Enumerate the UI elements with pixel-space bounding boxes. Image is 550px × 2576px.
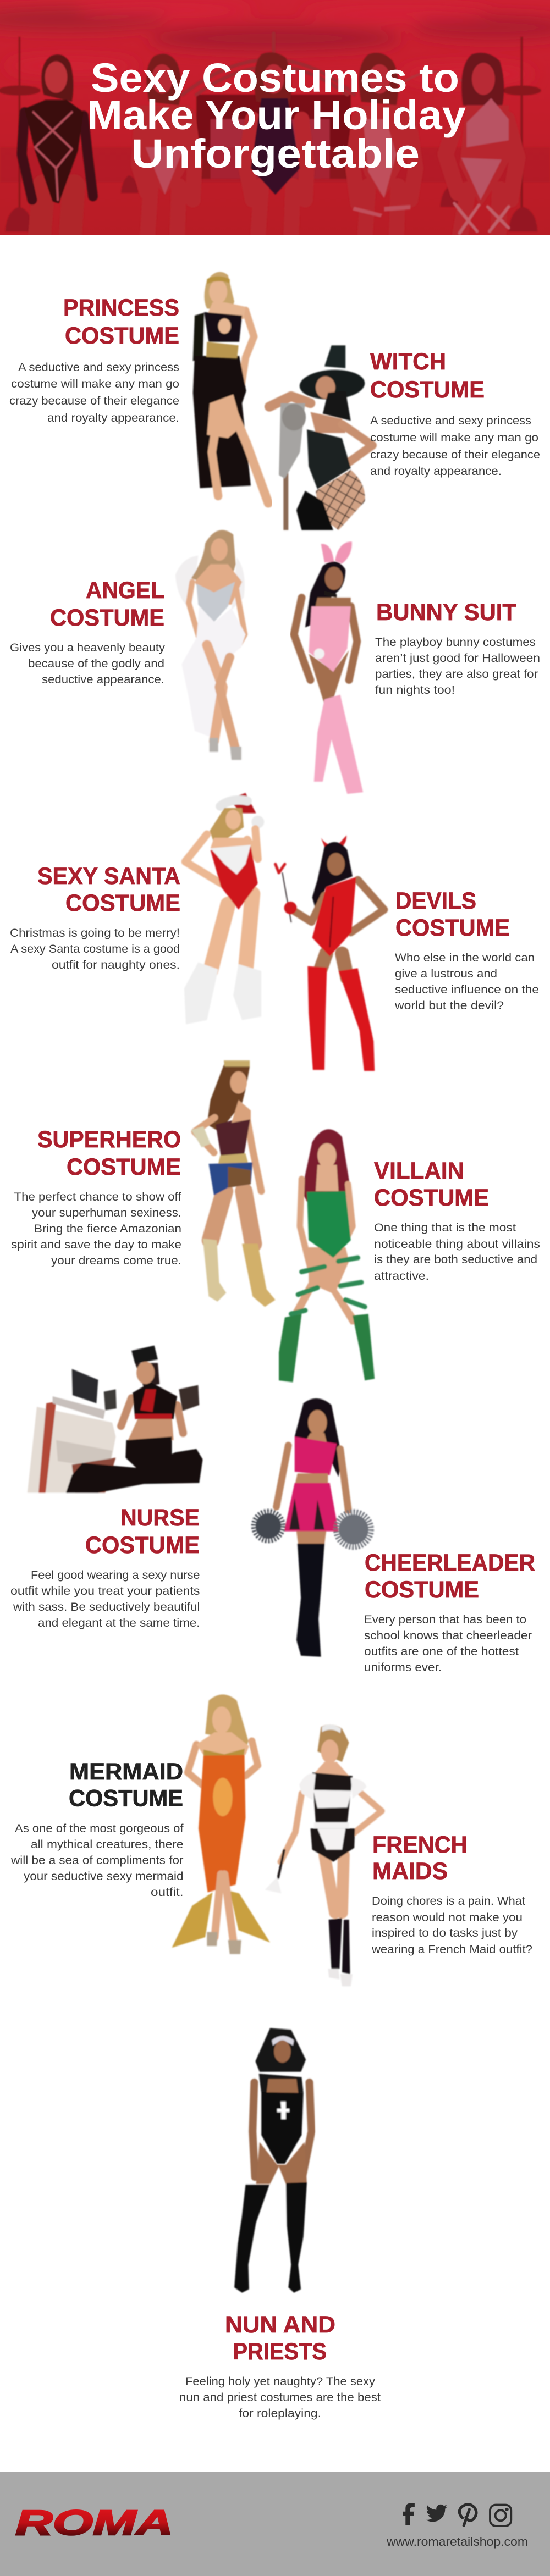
text: french maids description — [371, 1894, 532, 1956]
heading: angel costume — [50, 577, 164, 631]
heading: nurse costume: NURSE — [120, 1505, 200, 1531]
text: devils description: give a lustrous and — [395, 967, 497, 980]
text: angel description: Gives you a heavenly beauty — [10, 641, 165, 654]
text: angel description: seductive appearance. — [42, 673, 164, 686]
figure: superhero costume — [191, 1060, 276, 1307]
heading: witch costume — [370, 349, 485, 403]
heading: cheerleader costume: COSTUME — [365, 1577, 479, 1603]
logo: ROMA: ROMA — [15, 2503, 173, 2542]
text: witch description: A seductive and sexy princess — [370, 414, 531, 427]
text: santa description: Christmas is going to be merry! — [10, 926, 180, 939]
panel: superhero and villain — [11, 1060, 540, 1382]
panel: santa and devil — [10, 793, 539, 1071]
text: villain description: attractive. — [374, 1269, 429, 1283]
figure: nun costume — [234, 2028, 311, 2293]
text: mermaid description — [10, 1822, 184, 1899]
text: princess description — [9, 361, 179, 424]
figure: french maids — [265, 1724, 382, 1986]
figure: villain costume — [279, 1129, 375, 1382]
text: cheerleader description: uniforms ever. — [364, 1661, 442, 1674]
text: devils description: Who else in the world can — [395, 951, 535, 964]
text: mermaid description: As one of the most gorgeous of — [15, 1822, 184, 1835]
heading: devils costume: COSTUME — [395, 915, 510, 941]
heading: french maids: FRENCH — [372, 1832, 468, 1858]
heading: bunny suit: BUNNY SUIT — [376, 599, 516, 626]
heading: nurse costume: COSTUME — [85, 1532, 200, 1558]
text: french maids description: Doing chores is a pain. What — [372, 1894, 525, 1908]
text: cheerleader description: Every person that has been to — [364, 1613, 526, 1626]
website url: www.romaretailshop.com — [386, 2535, 528, 2549]
text: angel description — [10, 641, 165, 686]
text: cheerleader description: school knows that cheerleader — [364, 1629, 532, 1642]
text: devils description: world but the devil? — [394, 999, 504, 1012]
text: witch description — [370, 414, 540, 478]
figure: devils costume — [276, 836, 384, 1071]
icon: pinterest — [459, 2505, 476, 2525]
heading: nun and priests: PRIESTS — [233, 2339, 327, 2365]
text: cheerleader description: outfits are one of the hottest — [364, 1645, 519, 1658]
text: mermaid description: your seductive sexy mermaid — [24, 1870, 184, 1883]
heading: princess costume — [63, 295, 179, 349]
text: superhero description: The perfect chance to show off — [14, 1190, 182, 1203]
heading: witch costume: WITCH — [370, 349, 446, 375]
figure: mermaid costume — [172, 1694, 270, 1954]
heading: cheerleader costume: CHEERLEADER — [365, 1550, 535, 1576]
header banner — [0, 0, 550, 239]
heading: superhero costume: COSTUME — [67, 1154, 181, 1180]
panel: princess costume — [9, 272, 540, 530]
title: Unforgettable — [131, 131, 420, 176]
text: villain description: is they are both seductive and — [374, 1253, 537, 1266]
heading: nun and priests: NUN AND — [225, 2312, 336, 2338]
text: mermaid description: outfit. — [151, 1886, 184, 1899]
figure: witch costume — [270, 345, 372, 530]
heading: mermaid costume: MERMAID — [69, 1759, 183, 1785]
figure: bunny suit — [294, 541, 363, 794]
text: princess description: and royalty appearance. — [47, 411, 179, 424]
text: superhero description — [11, 1190, 182, 1267]
banner models — [22, 52, 518, 239]
text: princess description: crazy because of their elegance — [9, 394, 179, 407]
social icons — [403, 2503, 511, 2526]
text: princess description: A seductive and sexy princess — [18, 361, 179, 374]
heading: mermaid costume: COSTUME — [69, 1785, 183, 1812]
icon: instagram — [490, 2505, 511, 2526]
text: nurse description: with sass. Be seductively beautiful — [13, 1600, 200, 1613]
heading: angel costume: ANGEL — [86, 577, 164, 604]
figure: sexy santa costume — [184, 793, 264, 1024]
text: angel description: because of the godly and — [28, 657, 164, 670]
text: witch description: crazy because of their elegance — [370, 448, 540, 461]
text: bunny description — [375, 635, 540, 696]
text: villain description — [374, 1221, 540, 1283]
text: witch description: costume will make any man go — [370, 431, 538, 444]
text: princess description: costume will make any man go — [11, 377, 179, 390]
heading: sexy santa costume — [37, 863, 180, 916]
text: nurse description — [10, 1568, 200, 1629]
heading: sexy santa costume: SEXY SANTA — [37, 863, 180, 889]
text: mermaid description: will be a sea of compliments for — [10, 1854, 184, 1867]
heading: villain costume: VILLAIN — [374, 1158, 464, 1184]
text: witch description: and royalty appearance. — [370, 465, 502, 478]
text: santa description: A sexy Santa costume is a good — [10, 942, 180, 955]
text: superhero description: your dreams come true. — [51, 1254, 182, 1267]
title: Sexy Costumes to — [91, 55, 459, 101]
text: bunny description: fun nights too! — [375, 683, 455, 696]
heading: french maids — [372, 1832, 468, 1884]
text: superhero description: your superhuman sexiness. — [32, 1206, 182, 1219]
heading: mermaid costume — [69, 1759, 183, 1812]
heading: princess costume: COSTUME — [65, 323, 179, 349]
text: devils description — [394, 951, 539, 1012]
heading: princess costume: PRINCESS — [63, 295, 179, 321]
text: nun description: for roleplaying. — [239, 2407, 321, 2420]
text: nurse description: Feel good wearing a sexy nurse — [31, 1568, 200, 1582]
heading: villain costume: COSTUME — [374, 1185, 489, 1211]
text: superhero description: Bring the fierce Amazonian — [34, 1222, 182, 1235]
panel: mermaid and french maids — [10, 1694, 532, 1986]
heading: angel costume: COSTUME — [50, 605, 164, 631]
figure: nurse costume scene — [28, 1345, 203, 1492]
icon: twitter — [426, 2505, 447, 2522]
text: french maids description: reason would not make you — [372, 1911, 522, 1924]
heading: superhero costume — [37, 1126, 181, 1180]
icon: facebook — [403, 2503, 415, 2525]
heading: nurse costume — [85, 1505, 200, 1558]
text: bunny description: aren’t just good for Halloween — [375, 651, 540, 665]
text: bunny description: The playboy bunny costumes — [375, 635, 536, 649]
heading: witch costume: COSTUME — [370, 377, 485, 403]
figure: angel costume — [175, 530, 245, 760]
text: cheerleader description — [364, 1613, 532, 1674]
heading: devils costume — [395, 888, 510, 941]
footer — [0, 2472, 550, 2576]
text: nun description: Feeling holy yet naughty? The sexy — [185, 2375, 375, 2388]
text: nurse description: and elegant at the same time. — [38, 1616, 200, 1629]
heading: cheerleader costume — [365, 1550, 535, 1603]
text: santa description — [10, 926, 180, 971]
text: villain description: noticeable thing about villains — [374, 1237, 540, 1251]
text: bunny description: parties, they are also great for — [375, 667, 538, 681]
text: french maids description: wearing a French Maid outfit? — [371, 1943, 532, 1956]
text: nun description: nun and priest costumes are the best — [179, 2391, 381, 2404]
heading: devils costume: DEVILS — [395, 888, 476, 914]
panel: nurse and cheerleader — [10, 1345, 535, 1674]
title: Make Your Holiday — [87, 92, 466, 138]
heading: sexy santa costume: COSTUME — [65, 890, 180, 916]
heading: superhero costume: SUPERHERO — [37, 1126, 181, 1153]
text: nun description — [179, 2375, 381, 2420]
heading: villain costume — [374, 1158, 489, 1211]
figure: princess costume — [193, 272, 268, 503]
text: french maids description: inspired to do tasks just by — [372, 1926, 518, 1939]
text: santa description: outfit for naughty ones. — [52, 958, 180, 971]
panel: nun and priests — [179, 2028, 381, 2420]
text: villain description: One thing that is the most — [374, 1221, 516, 1234]
banner background: stage and poles — [0, 34, 550, 231]
heading: nun and priests — [225, 2312, 336, 2365]
text: devils description: seductive influence on the — [395, 983, 539, 996]
heading: french maids: MAIDS — [372, 1858, 448, 1884]
text: superhero description: spirit and save the day to make — [11, 1238, 182, 1251]
figure: cheerleader costume — [255, 1398, 370, 1657]
panel: angel and bunny — [10, 530, 540, 794]
title — [87, 55, 466, 176]
text: mermaid description: all mythical creatures, there — [31, 1838, 184, 1851]
text: nurse description: outfit while you treat your patients — [10, 1584, 200, 1597]
